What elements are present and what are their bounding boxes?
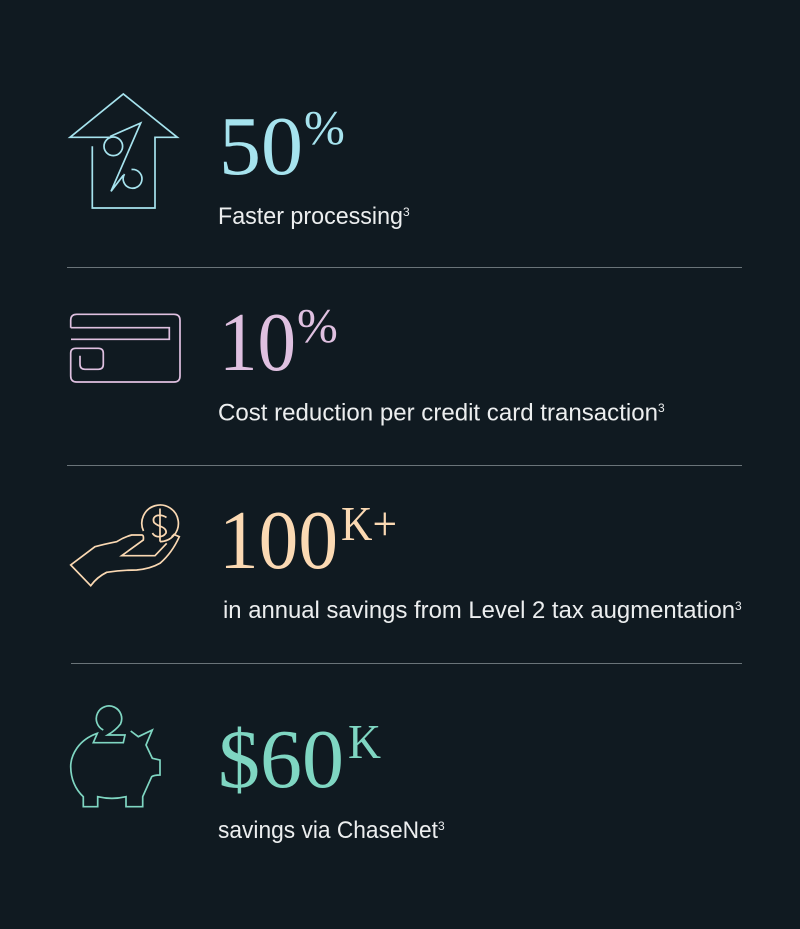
icon: credit card [71, 314, 180, 382]
icon: piggy bank with coin [71, 706, 160, 807]
label: ChaseNet savings: 3 [438, 819, 445, 833]
stat: $60K: K [348, 714, 381, 769]
stat: $60K: $60 [218, 713, 344, 806]
label: ChaseNet savings: savings via ChaseNet [218, 817, 438, 844]
stat: 10%: 10 [219, 296, 296, 389]
panel: ChaseNet savings [71, 706, 445, 844]
stat: 50%: 50 [219, 100, 303, 193]
label: annual savings: 3 [735, 599, 742, 613]
stat: 50% [219, 100, 345, 193]
stat: 100K+: K+ [341, 496, 397, 551]
label: annual savings: in annual savings from Level 2 tax augmentation [223, 597, 735, 624]
stat: 50%: % [304, 100, 345, 155]
label: cost reduction: 3 [658, 401, 665, 415]
label: faster processing: 3 [403, 205, 410, 219]
label: cost reduction: Cost reduction per credit card transaction [218, 400, 658, 426]
panel: annual savings [71, 494, 742, 624]
label: faster processing: Faster processing [218, 203, 403, 230]
panel: faster processing [70, 94, 410, 230]
icon: hand holding coin [71, 505, 179, 586]
panel: cost reduction [71, 296, 665, 426]
icon: house arrow with percent sign [70, 94, 177, 208]
stat: 100K+: 100 [219, 494, 338, 587]
stat: 10%: % [297, 298, 338, 353]
